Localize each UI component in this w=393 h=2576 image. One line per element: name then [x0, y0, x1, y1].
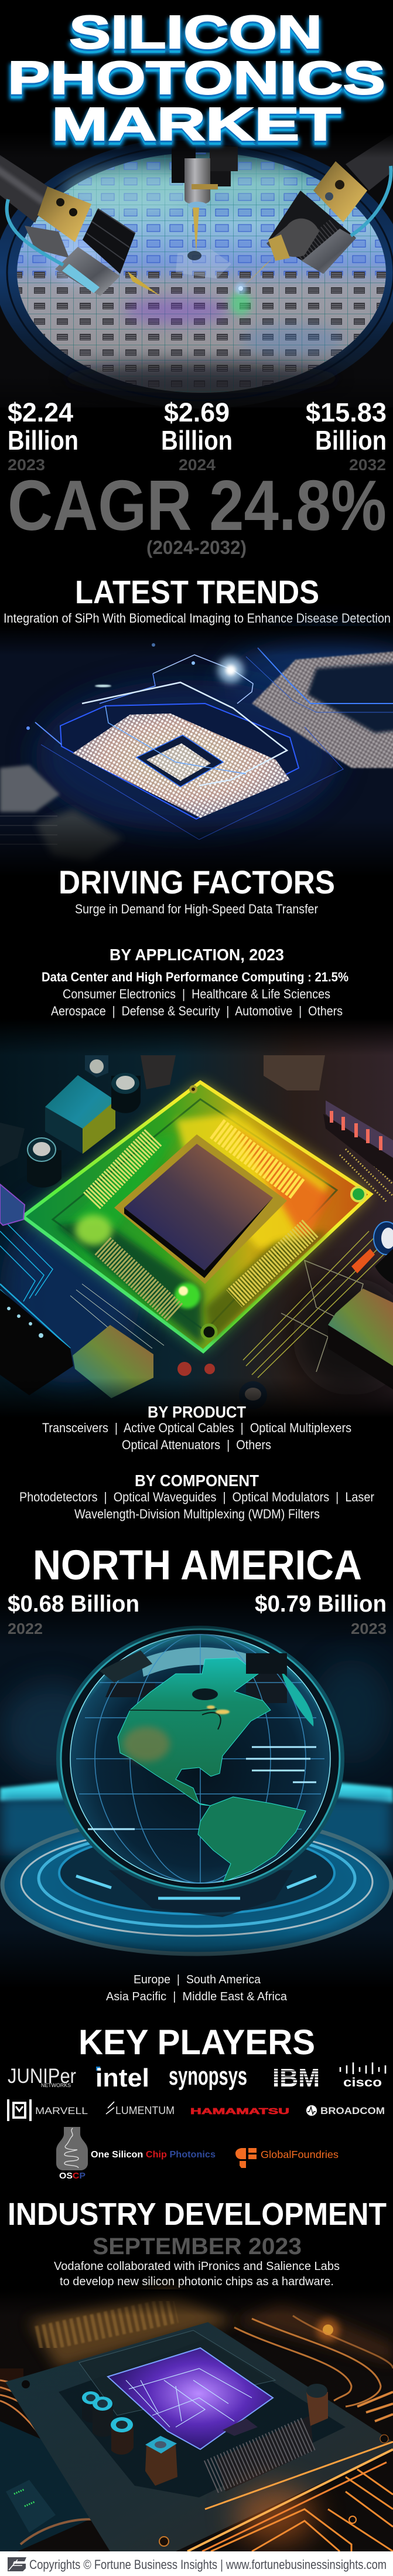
left probe arm: [0, 151, 160, 296]
logo: Lumentum: LUMENTUM: [115, 2105, 175, 2116]
latest trends heading: [4, 573, 391, 626]
driving factors: DRIVING FACTORS: [59, 864, 335, 900]
industry development heading: to develop new silicon photonic chips as a hardware.: [60, 2275, 334, 2288]
logo: One Silicon Chip Photonics: One Silicon Chip Photonics: [91, 2150, 216, 2160]
logo: Intel: intel: [95, 2064, 149, 2092]
title: SILICON: [69, 8, 322, 60]
North America: [118, 1658, 271, 1806]
segment by application: BY APPLICATION, 2023: [110, 946, 284, 964]
center probe arm: [172, 141, 238, 278]
silicon wafer: [17, 152, 386, 393]
logo: Broadcom: BROADCOM: [320, 2105, 385, 2116]
title: SILICON: [69, 6, 322, 58]
value 2023: 2023: [351, 1620, 387, 1637]
footer bar: [0, 2551, 393, 2576]
purple chip: [108, 2348, 273, 2449]
segment by component: BY COMPONENT: [135, 1471, 259, 1490]
company logos: [8, 2062, 385, 2181]
segment by product: [42, 1403, 351, 1452]
horizon glow: [0, 1781, 393, 1803]
logo: Lumentum: [106, 2102, 175, 2116]
driving factors: Surge in Demand for High-Speed Data Transfer: [75, 902, 318, 916]
title: SILICON: [69, 10, 322, 62]
blurred components: [0, 765, 60, 812]
value 2022: $0.68 Billion: [8, 1591, 139, 1617]
stat 2032: 2032: [349, 456, 386, 474]
market size stats: [8, 397, 387, 474]
logo: Juniper: JUNIPer: [8, 2065, 76, 2088]
chip outlines: [60, 704, 299, 819]
title: PHOTONICS: [8, 56, 385, 108]
main board plate: [5, 2322, 393, 2551]
segment by application: [42, 946, 348, 1018]
hero image: wafer probe station: [0, 132, 393, 410]
outer traces: [0, 1143, 393, 1378]
orange traces: [0, 2316, 393, 2468]
value 2023: $0.79 Billion: [255, 1591, 387, 1617]
right probe arm: [235, 134, 393, 294]
glowing traces, lower right: [187, 2442, 393, 2551]
stat 2023: $2.24: [8, 397, 73, 427]
logo: Cisco: [340, 2062, 385, 2089]
industry development heading: Vodafone collaborated with iPronics and Salience Labs: [54, 2260, 340, 2273]
latest trends heading: LATEST TRENDS: [75, 573, 319, 610]
grid lines: [76, 1634, 324, 1883]
logo: Synopsys: synopsys: [169, 2062, 247, 2091]
stat 2024: Billion: [161, 425, 233, 456]
stat 2023: [8, 397, 78, 474]
stat 2032: $15.83: [306, 397, 387, 427]
logo: One Silicon Chip Photonics: OSCP: [59, 2171, 86, 2181]
PCB diamond with rainbow glow: [23, 1082, 371, 1351]
logo: Marvell: [8, 2099, 88, 2121]
driving factors: [59, 864, 335, 916]
globe image: North America: [0, 1595, 393, 1989]
title: PHOTONICS: [8, 53, 385, 106]
component pcb: [59, 2339, 346, 2497]
segment by application: Aerospace | Defense & Security | Automotive | Others: [51, 1004, 343, 1018]
dark circuit board, lower left: [0, 2421, 100, 2551]
title: [8, 6, 385, 154]
logo: Marvell: MARVELL: [35, 2105, 88, 2116]
heat-sink fins: [217, 2415, 313, 2492]
components: [0, 1055, 393, 1409]
other regions: Europe | South America: [134, 1973, 261, 1986]
light flares: [218, 657, 244, 683]
wafer chuck ring: [0, 137, 393, 409]
chip leads: [91, 1129, 310, 1313]
title: PHOTONICS: [8, 52, 385, 104]
capacitors: [82, 2384, 328, 2486]
stat 2024: $2.69: [164, 397, 230, 427]
segment by component: [19, 1471, 374, 1521]
logo: GlobalFoundries: [235, 2148, 339, 2168]
pin array: [73, 713, 290, 818]
circuit traces: [35, 648, 393, 786]
key players heading: KEY PLAYERS: [78, 2023, 315, 2062]
stat 2023: 2023: [8, 456, 45, 474]
segment by product: Optical Attenuators | Others: [122, 1437, 271, 1452]
title: MARKET: [52, 102, 341, 154]
stat 2032: [306, 397, 387, 474]
regional heading: NORTH AMERICA: [33, 1542, 362, 1589]
value 2022: [8, 1591, 139, 1637]
base rings: [2, 1816, 391, 1954]
title: SILICON: [69, 10, 322, 62]
segment by product: Transceivers | Active Optical Cables | Optical Multiplexers: [42, 1420, 351, 1435]
processor die: [136, 735, 223, 787]
other regions: Asia Pacific | Middle East & Africa: [106, 1990, 288, 2003]
title: PHOTONICS: [8, 56, 385, 108]
circuit board image: [0, 1019, 393, 1418]
logo: IBM: IBM: [272, 2064, 320, 2092]
logo: Cisco: cisco: [343, 2076, 382, 2089]
Greenland crescent: [281, 1671, 313, 1727]
globe sphere: [56, 1626, 344, 1892]
stat 2024: [161, 397, 233, 474]
secondary chip: [252, 651, 393, 768]
stat 2023: Billion: [8, 425, 78, 456]
processor die: [124, 1144, 273, 1270]
regional heading: [8, 1542, 387, 1637]
industry development heading: [8, 2197, 387, 2288]
stat 2024: 2024: [179, 456, 216, 474]
title: MARKET: [52, 100, 341, 152]
footer logo: [8, 2557, 26, 2571]
logo: One Silicon Chip Photonics: [56, 2127, 216, 2181]
value 2022: 2022: [8, 1620, 43, 1637]
trends image: glowing processor: [0, 626, 393, 876]
title: MARKET: [52, 102, 341, 154]
title: MARKET: [52, 98, 341, 150]
industry development heading: SEPTEMBER 2023: [93, 2234, 302, 2259]
segment by application: Data Center and High Performance Computing : 21.5%: [42, 970, 348, 984]
logo: GlobalFoundries: GlobalFoundries: [261, 2149, 339, 2160]
logo: Juniper: NETWORKS: [41, 2082, 71, 2088]
value 2023: [255, 1591, 387, 1637]
development image: purple-glow chip: [0, 2289, 393, 2551]
other regions: [106, 1973, 288, 2003]
logo: Hamamatsu: HAMAMATSU: [190, 2106, 289, 2116]
segment by application: Consumer Electronics | Healthcare & Life Sciences: [63, 987, 330, 1001]
segment by product: BY PRODUCT: [148, 1403, 246, 1421]
South America: [198, 1797, 306, 1882]
segment by component: Wavelength-Division Multiplexing (WDM) Filters: [74, 1507, 320, 1521]
CAGR figure: (2024-2032): [146, 537, 247, 558]
